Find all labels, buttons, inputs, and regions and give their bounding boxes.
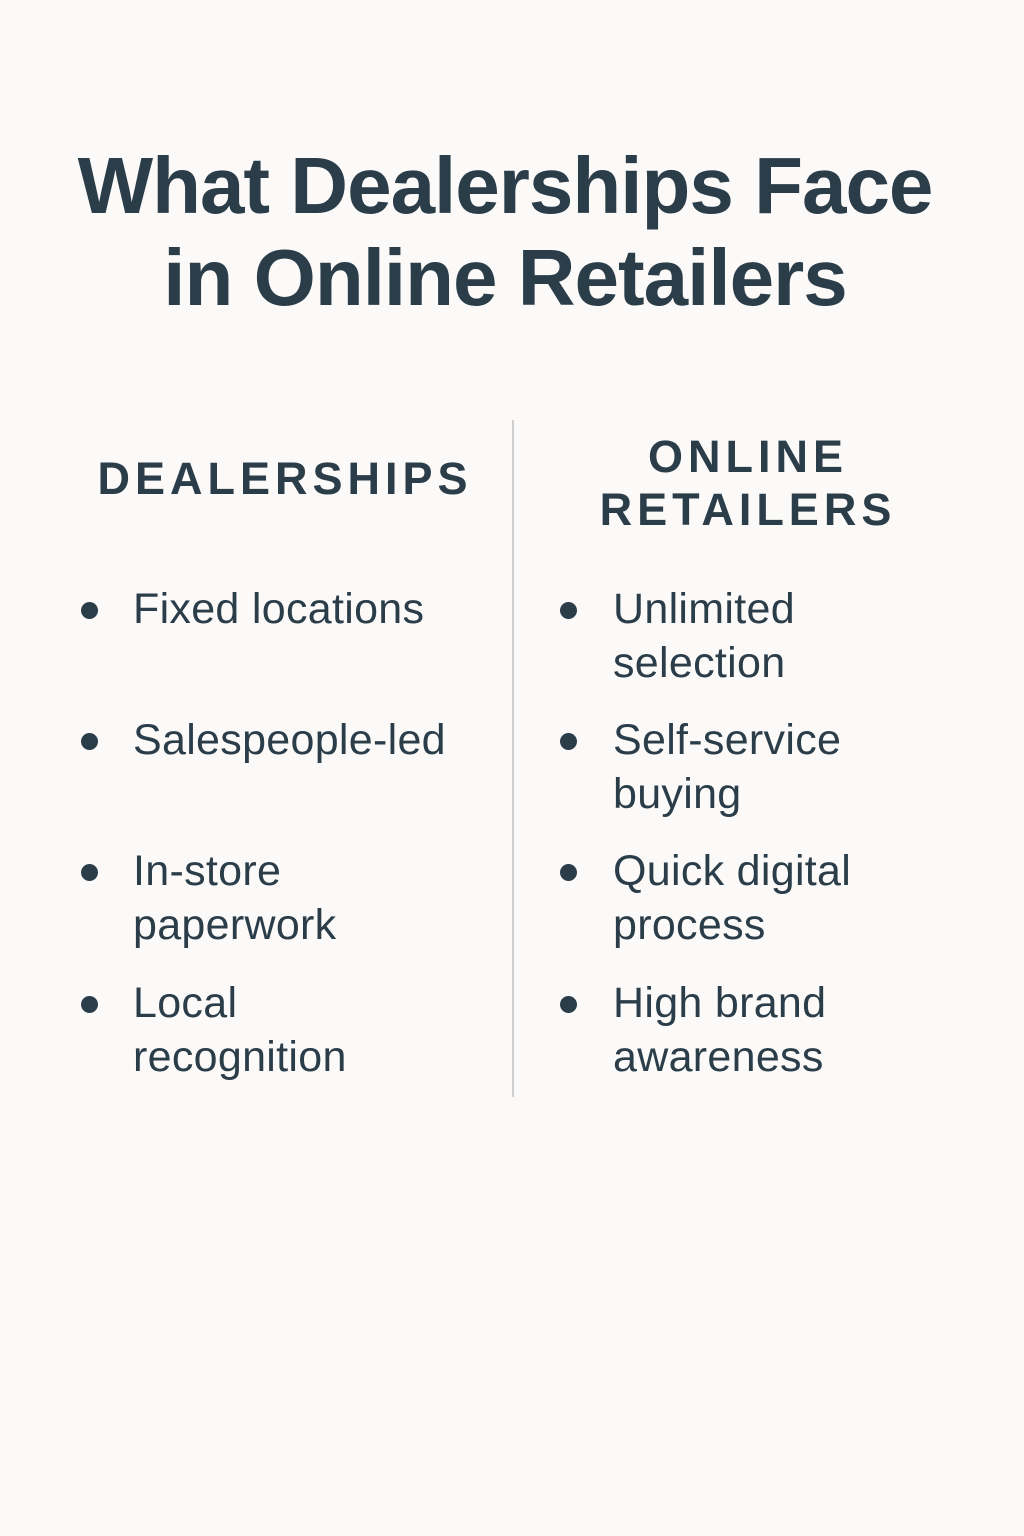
title: in Online Retailers (163, 233, 847, 322)
item: high brand awareness: awareness (613, 1033, 824, 1081)
title: What Dealerships Face (78, 141, 932, 230)
list: dealerships (81, 585, 446, 1081)
item: unlimited selection (560, 585, 795, 687)
item: fixed locations: Fixed locations (133, 585, 424, 633)
item: self-service buying (560, 716, 841, 818)
heading: online retailers (600, 431, 896, 535)
item: in-store paperwork (81, 847, 336, 949)
item: quick digital process: process (613, 901, 766, 949)
item: in-store paperwork: paperwork (133, 901, 336, 949)
heading: online retailers: ONLINE (648, 431, 848, 482)
heading: dealerships: DEALERSHIPS (97, 453, 473, 504)
heading: online retailers: RETAILERS (600, 484, 896, 535)
item: local recognition: Local (133, 979, 237, 1027)
item: salespeople-led: Salespeople-led (133, 716, 446, 764)
item: high brand awareness (560, 979, 826, 1081)
item: high brand awareness: High brand (613, 979, 826, 1027)
item: local recognition (81, 979, 347, 1081)
item: in-store paperwork: In-store (133, 847, 281, 895)
title (78, 141, 932, 322)
item: unlimited selection: Unlimited (613, 585, 795, 633)
item: self-service buying: buying (613, 770, 742, 818)
item: local recognition: recognition (133, 1033, 347, 1081)
item: self-service buying: Self-service (613, 716, 841, 764)
item: quick digital process: Quick digital (613, 847, 851, 895)
list: online retailers (560, 585, 851, 1081)
item: unlimited selection: selection (613, 639, 785, 687)
item: quick digital process (560, 847, 851, 949)
divider (512, 420, 514, 1097)
